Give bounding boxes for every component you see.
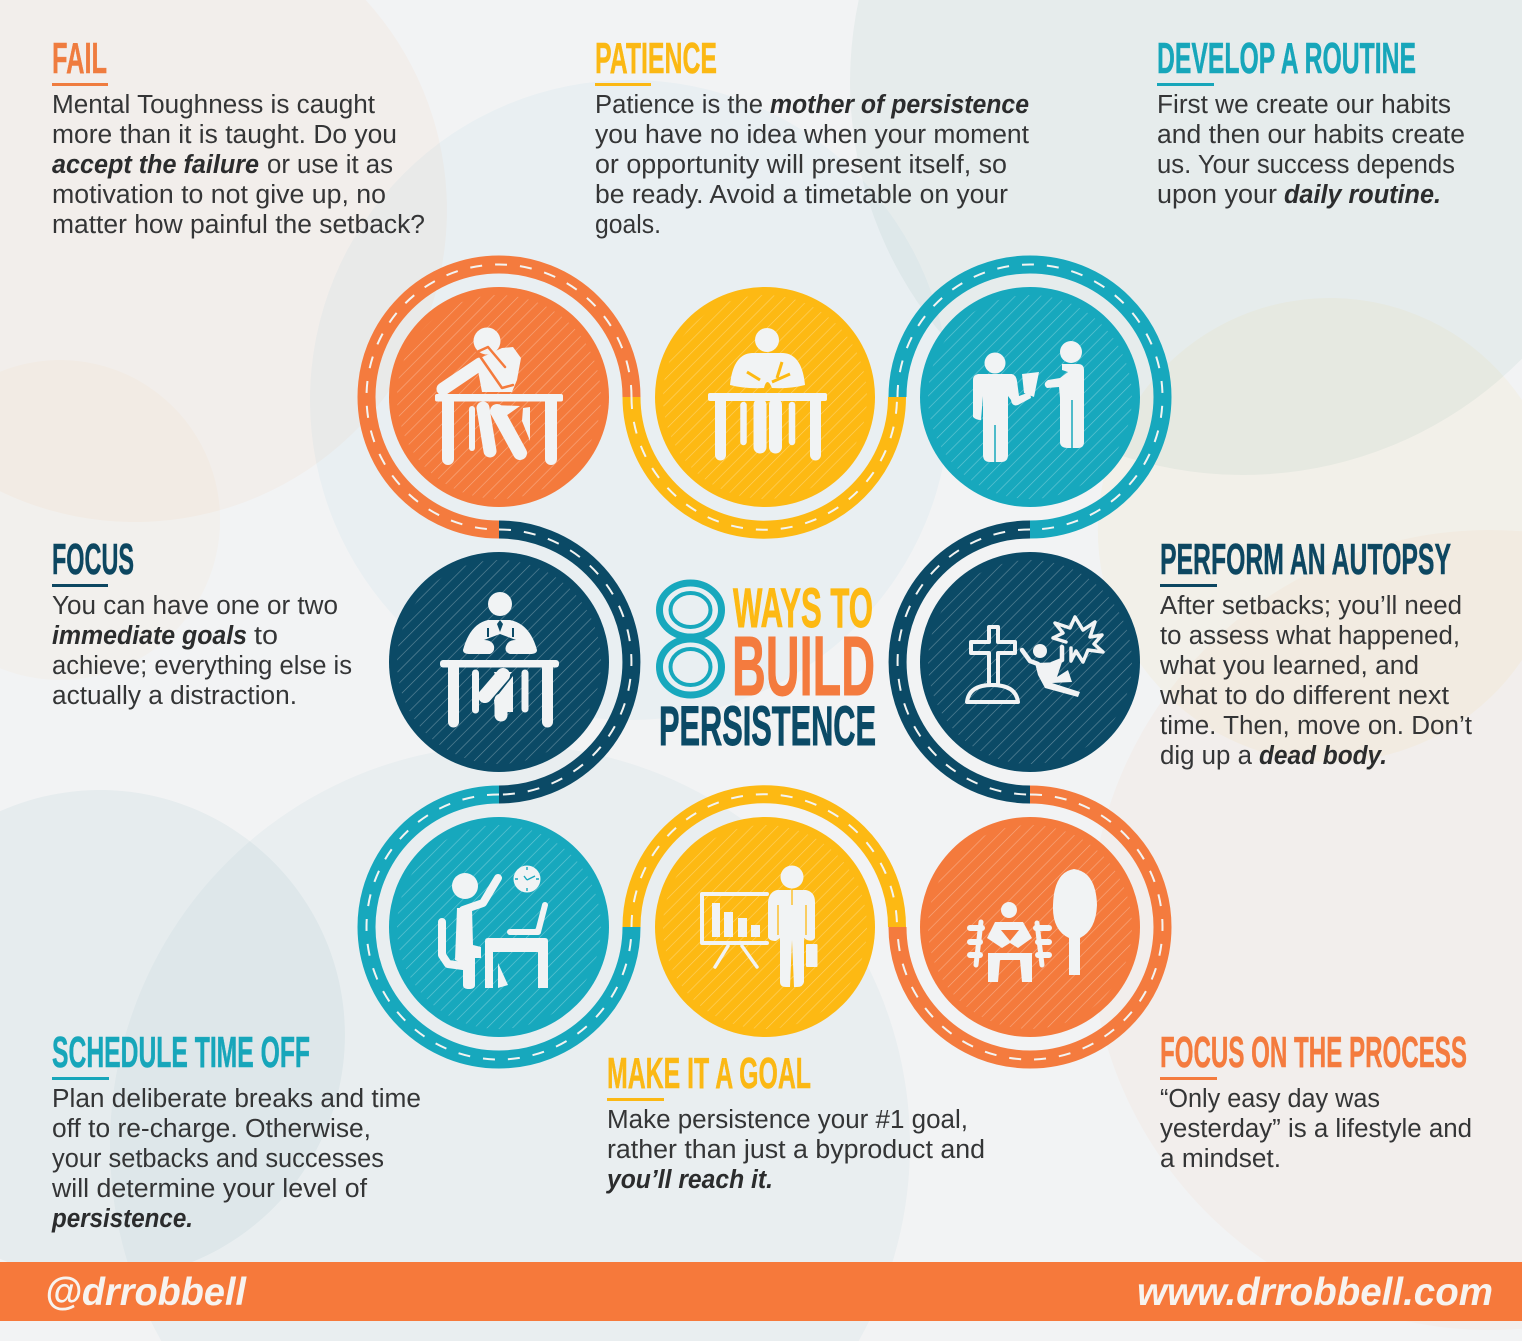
heading and text: perform an autopsy: After setbacks; you’ll need [1160,592,1462,620]
heading and text: schedule time off [51,1028,421,1233]
heading and text: patience: Patience is the [595,91,763,119]
icon: fail, person with head in hands at desk [389,287,609,507]
footer banner: www.drrobbell.com [1137,1271,1493,1314]
heading and text: perform an autopsy: to assess what happened, [1160,622,1460,650]
heading and text: focus on the process [1160,1028,1472,1173]
heading and text: make it a goal: rather than just a byproduct and [607,1136,985,1164]
heading and text: perform an autopsy [1159,535,1472,770]
icon: autopsy, grave cross and falling figure [920,552,1140,772]
heading and text: fail: matter how painful the setback? [52,211,425,239]
heading and text: schedule time off: will determine your level of [51,1175,368,1203]
heading and text: focus: immediate goals [52,622,247,650]
heading and text: make it a goal: Make persistence your #1 goal, [607,1106,968,1134]
heading and text: develop a routine: upon your [1157,181,1278,209]
icon: routine, two people exchanging a paper [920,287,1140,507]
heading and text: patience: PATIENCE [595,34,717,83]
heading and text: fail: motivation to not give up, no [52,181,386,209]
heading and text: make it a goal [605,1049,985,1194]
heading and text: perform an autopsy: what you learned, and [1159,652,1419,680]
heading and text: develop a routine: and then our habits create [1157,121,1465,149]
title: 8 ways to build persistence [659,576,876,757]
icon: focus, businessman at desk [389,552,609,772]
footer banner: @drrobbell [45,1271,247,1314]
title: 8 ways to build persistence: WAYS TO [733,576,873,639]
heading and text: fail: FAIL [52,34,107,83]
heading and text: schedule time off: off to re-charge. Otherwise, [52,1115,371,1143]
heading and text: focus: achieve; everything else is [52,652,352,680]
heading and text: focus: actually a distraction. [52,682,297,710]
heading and text: patience: or opportunity will present itself, so [595,151,1007,179]
heading and text: fail: accept the failure [52,151,259,179]
icon: patience, person writing at desk [655,287,875,507]
heading and text: fail [52,34,425,239]
heading and text: patience: mother of persistence [770,91,1029,119]
title: 8 ways to build persistence: BUILD [732,619,875,713]
heading and text: develop a routine: daily routine. [1284,181,1441,209]
heading and text: focus: to [254,622,278,650]
heading and text: fail: or use it as [267,151,393,179]
heading and text: develop a routine: First we create our habits [1157,91,1451,119]
heading and text: schedule time off: Plan deliberate breaks and time [52,1085,421,1113]
heading and text: make it a goal: you’ll reach it. [605,1166,773,1194]
heading and text: focus [52,535,352,710]
heading and text: perform an autopsy: dead body. [1259,742,1387,770]
title: 8 ways to build persistence: PERSISTENCE [659,694,876,757]
heading and text: patience: you have no idea when your moment [595,121,1029,149]
heading and text: schedule time off: SCHEDULE TIME OFF [52,1028,310,1077]
heading and text: perform an autopsy: what to do different next [1159,682,1449,710]
heading and text: schedule time off: persistence. [51,1205,193,1233]
heading and text: focus on the process: “Only easy day was [1160,1085,1380,1113]
heading and text: develop a routine: us. Your success depends [1157,151,1455,179]
heading and text: focus on the process: yesterday” is a lifestyle and [1160,1115,1472,1143]
heading and text: patience [595,34,1029,239]
heading and text: focus: You can have one or two [52,592,338,620]
heading and text: make it a goal: MAKE IT A GOAL [607,1049,811,1098]
heading and text: perform an autopsy: dig up a [1160,742,1253,770]
heading and text: fail: Mental Toughness is caught [52,91,375,119]
icon: schedule time off, person at laptop with clock [389,817,609,1037]
heading and text: perform an autopsy: time. Then, move on. Don’t [1160,712,1472,740]
heading and text: schedule time off: your setbacks and successes [52,1145,384,1173]
icon: make it a goal, man with chart board [655,817,875,1037]
footer banner [0,1262,1522,1321]
heading and text: focus on the process: a mindset. [1160,1145,1281,1173]
heading and text: patience: be ready. Avoid a timetable on your [595,181,1009,209]
icon: focus on the process, person on bench with tree [920,817,1140,1037]
heading and text: fail: more than it is taught. Do you [52,121,397,149]
heading and text: focus: FOCUS [52,535,134,584]
heading and text: patience: goals. [595,211,661,239]
heading and text: develop a routine [1157,34,1465,209]
winding road connecting the circles [367,265,1162,1060]
